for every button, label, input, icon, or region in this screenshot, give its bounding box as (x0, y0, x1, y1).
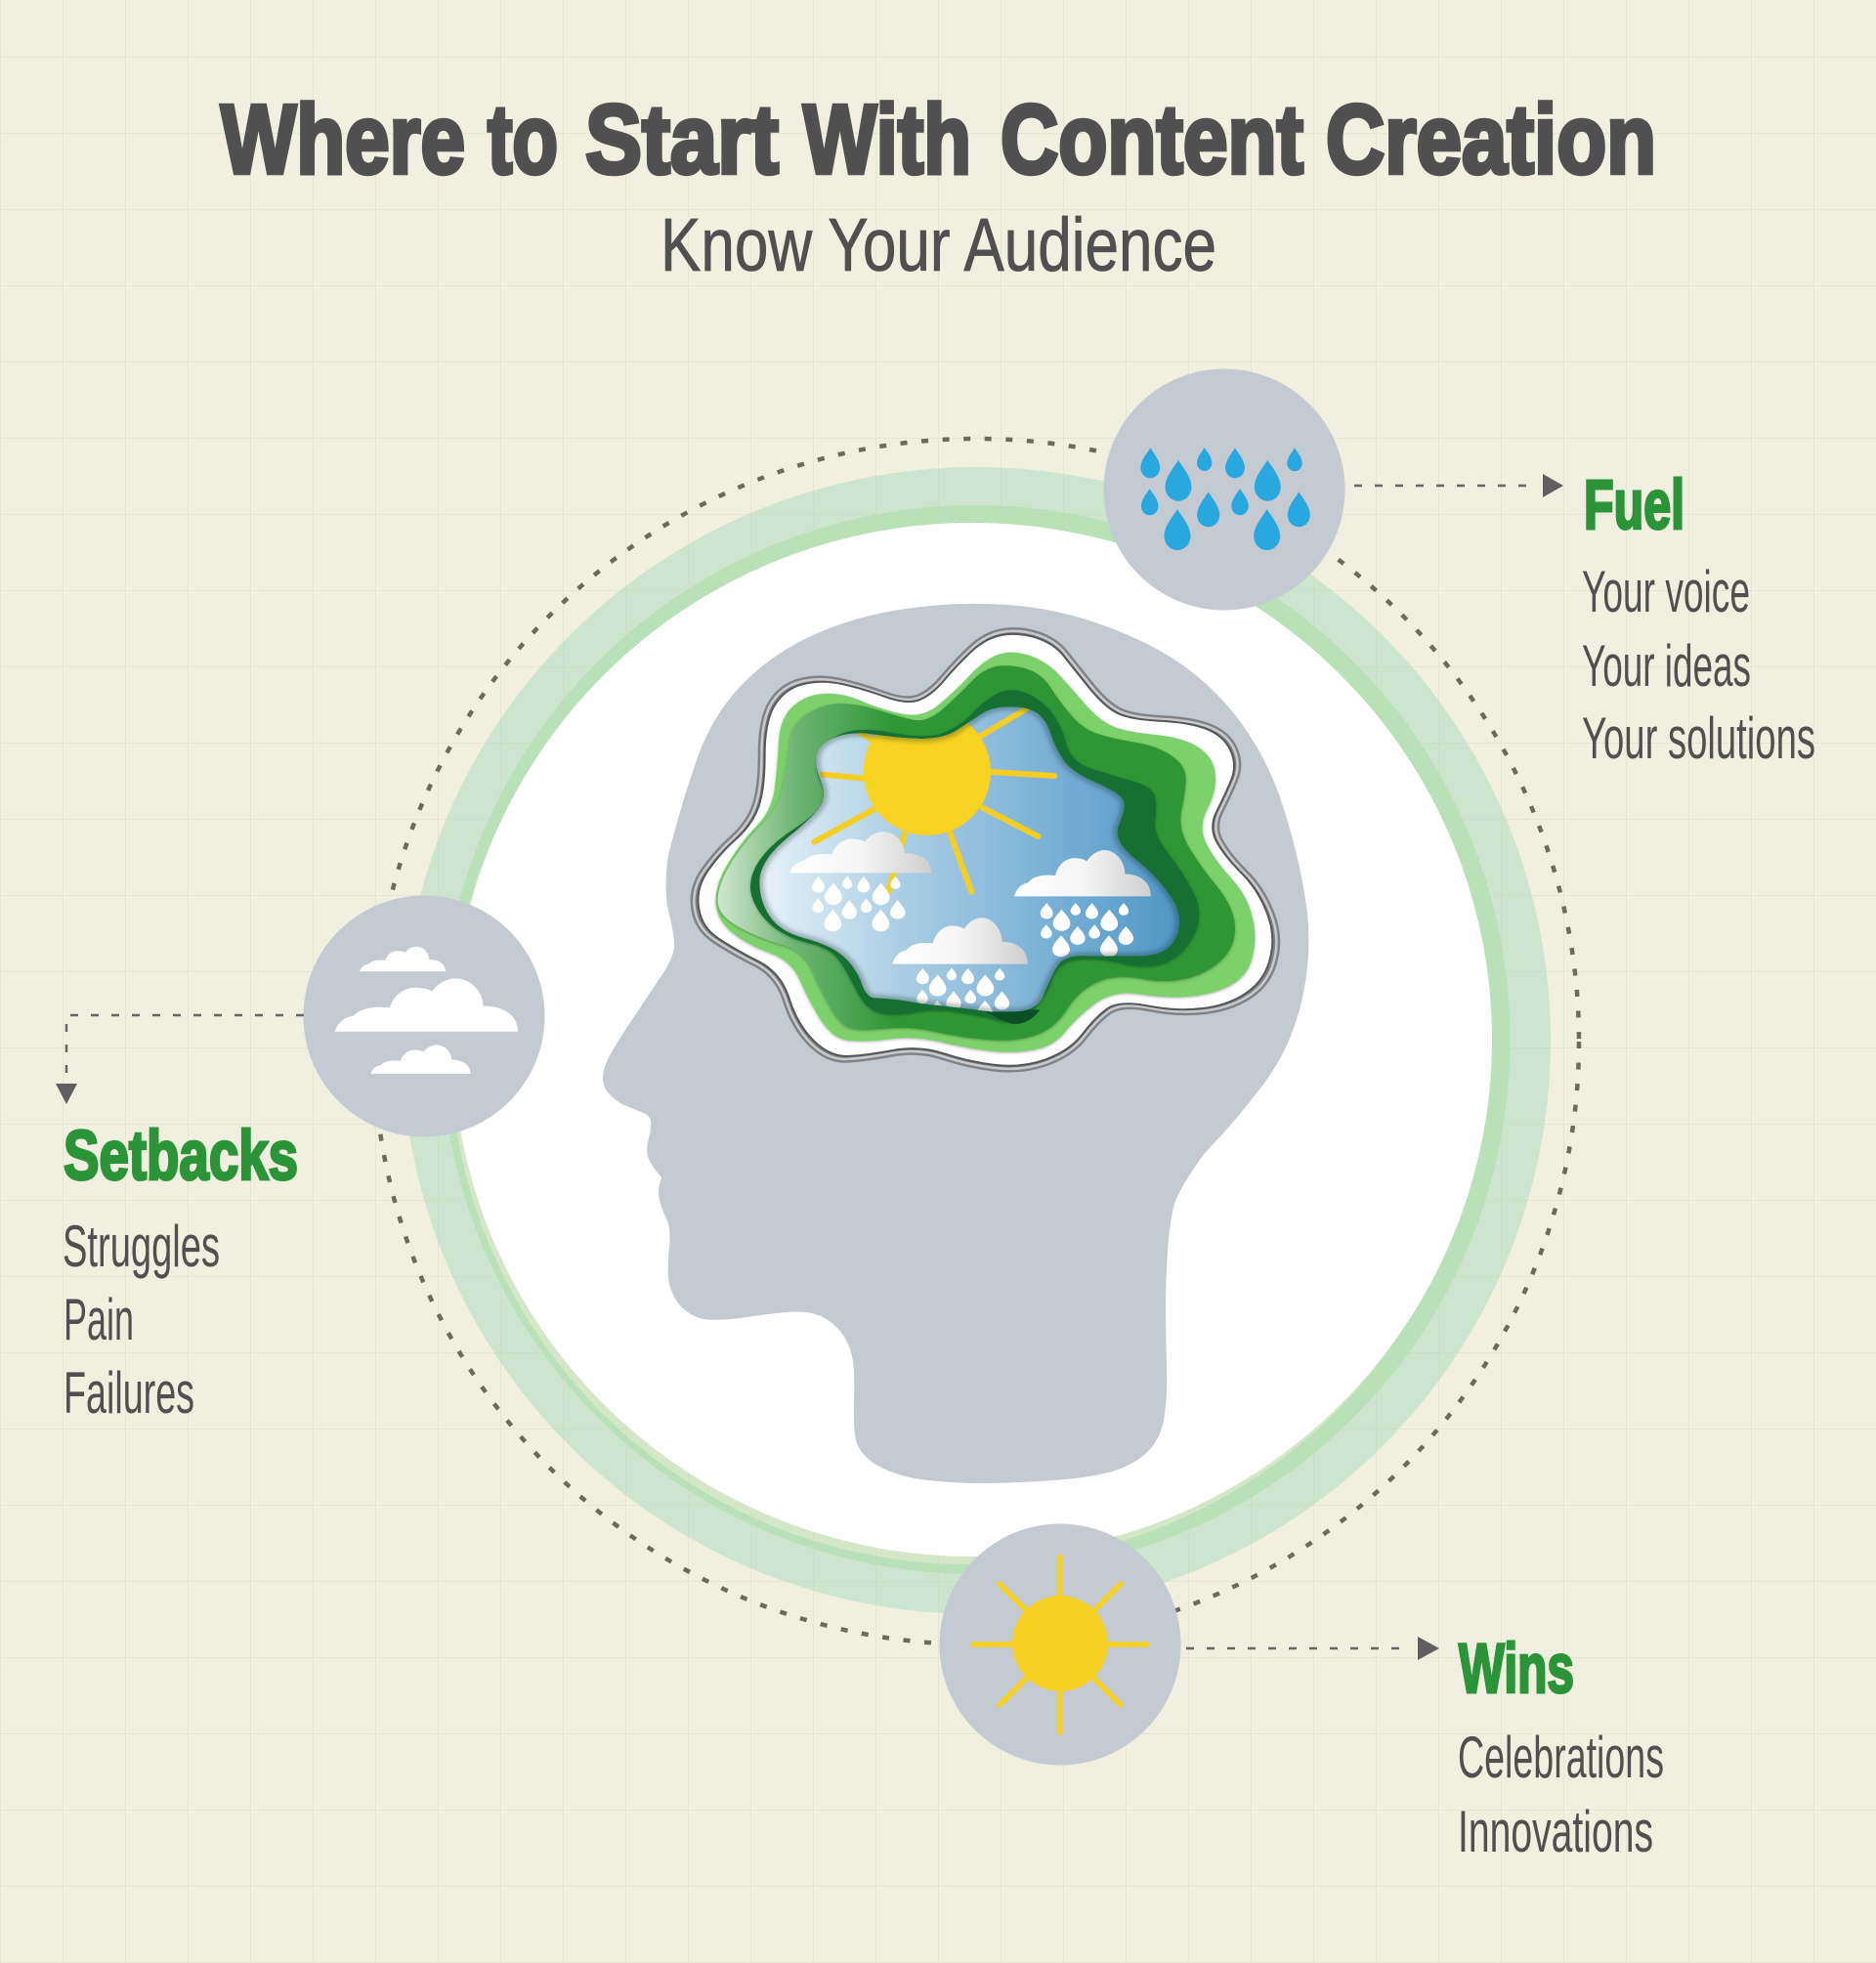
icon: rain drops in circle (1104, 369, 1344, 610)
title: Content (1001, 85, 1303, 194)
dotted orbit (373, 439, 1579, 1644)
cloud and rain three (892, 917, 1028, 1022)
arrow to Wins (1186, 1637, 1439, 1660)
icon: sun in circle (940, 1524, 1180, 1765)
arrow to Fuel (1354, 474, 1563, 497)
subtitle: Know Your Audience (661, 203, 1216, 287)
title: to (488, 85, 558, 194)
icon: clouds in circle (303, 895, 545, 1137)
sun in brain (814, 706, 1054, 892)
title: Start (585, 85, 779, 194)
text block: Fuel: Your voice (1582, 559, 1750, 624)
white inner circle (452, 523, 1492, 1557)
title: Creation (1326, 85, 1656, 194)
text block: Setbacks: Setbacks (64, 1118, 298, 1195)
text block: Fuel: Fuel (1584, 467, 1684, 544)
text block: Fuel (1582, 467, 1815, 771)
mid green paper layer (718, 665, 1235, 1041)
light green paper layer (716, 653, 1255, 1052)
text block: Wins: Celebrations (1458, 1725, 1664, 1790)
head silhouette (603, 604, 1308, 1483)
title: With (803, 85, 971, 194)
outer white paper layer with gray edge (694, 631, 1276, 1069)
cloud and rain two (1014, 850, 1151, 957)
text block: Setbacks: Pain (64, 1287, 134, 1352)
cloud and rain one (789, 832, 931, 931)
arrow to Setbacks (56, 1015, 304, 1104)
brain cutout scene (694, 631, 1276, 1069)
title: Where (221, 85, 465, 194)
text block: Setbacks: Failures (64, 1360, 194, 1426)
text block: Setbacks: Struggles (63, 1214, 220, 1279)
title (221, 85, 1656, 194)
text block: Wins: Innovations (1458, 1799, 1653, 1864)
sky window with sun, clouds and rain (759, 706, 1180, 1012)
dark green paper layer (750, 690, 1199, 1022)
text block: Setbacks (63, 1118, 298, 1426)
deep shadow under sky (983, 1009, 1040, 1024)
text block: Wins: Wins (1459, 1631, 1574, 1708)
text block: Wins (1458, 1631, 1664, 1864)
text block: Fuel: Your ideas (1582, 633, 1751, 699)
green ring (402, 467, 1551, 1614)
